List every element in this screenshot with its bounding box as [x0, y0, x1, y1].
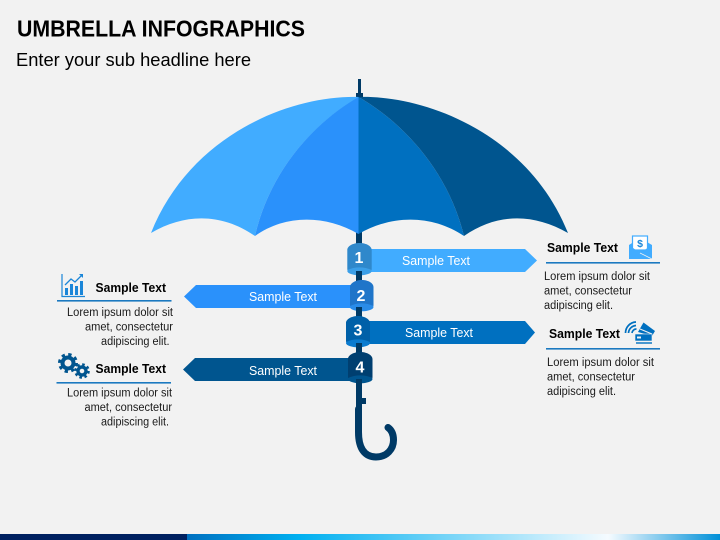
description: amet, consectetur — [547, 372, 635, 384]
umbrella top spike — [356, 79, 363, 98]
umbrella handle — [358, 409, 394, 457]
icon: money envelope: $ — [637, 238, 643, 250]
arrow 1 — [368, 249, 537, 272]
title: UMBRELLA INFOGRAPHICS — [17, 16, 305, 42]
step 1 marker: 1 — [355, 250, 364, 267]
description: adipiscing elit. — [547, 386, 616, 398]
canopy panel 4 — [358, 97, 568, 236]
block: bottom left — [56, 354, 173, 428]
handle catch — [361, 398, 366, 404]
step 4 marker — [348, 352, 372, 387]
step 3 marker: 3 — [354, 322, 363, 340]
icon: gears — [60, 354, 88, 378]
subtitle: Enter your sub headline here — [16, 49, 251, 70]
heading: Sample Text — [96, 281, 167, 295]
description: Lorem ipsum dolor sit — [67, 388, 173, 400]
description — [547, 357, 655, 398]
step 3 marker — [346, 316, 370, 354]
description: amet, consectetur — [544, 286, 632, 298]
description: amet, consectetur — [85, 322, 173, 334]
canopy panel 3 — [358, 97, 464, 236]
arrow 4 — [183, 358, 352, 381]
description: adipiscing elit. — [101, 416, 169, 428]
arrow 2: Sample Text — [249, 290, 318, 304]
step 1 marker — [347, 243, 372, 282]
description — [67, 307, 174, 348]
description — [67, 388, 173, 428]
block: top left — [57, 274, 174, 348]
description: adipiscing elit. — [101, 336, 170, 348]
arrow 4: Sample Text — [249, 364, 318, 378]
description: adipiscing elit. — [544, 300, 613, 312]
step 2 marker — [350, 280, 374, 318]
description — [544, 271, 651, 312]
block: bottom right — [546, 322, 660, 398]
arrow 3: Sample Text — [405, 326, 474, 340]
step 4 marker: 4 — [356, 360, 365, 376]
block: top right — [544, 236, 660, 312]
description: Lorem ipsum dolor sit — [547, 357, 655, 369]
description: Lorem ipsum dolor sit — [67, 307, 174, 319]
heading: Sample Text — [96, 362, 167, 376]
description: amet, consectetur — [84, 402, 172, 414]
step 2 marker: 2 — [357, 288, 366, 305]
description: Lorem ipsum dolor sit — [544, 271, 651, 283]
icon: growth chart — [62, 274, 85, 296]
arrow 1: Sample Text — [402, 254, 471, 268]
umbrella shaft — [356, 232, 362, 410]
arrow 3 — [367, 321, 535, 344]
canopy panel 2 — [255, 97, 358, 236]
heading: Sample Text — [549, 327, 621, 341]
footer bar — [0, 534, 720, 540]
umbrella — [151, 79, 568, 457]
canopy panel 1 — [151, 97, 359, 236]
heading: Sample Text — [547, 241, 619, 255]
arrow 2 — [184, 285, 353, 308]
icon: contactless card — [626, 322, 655, 343]
